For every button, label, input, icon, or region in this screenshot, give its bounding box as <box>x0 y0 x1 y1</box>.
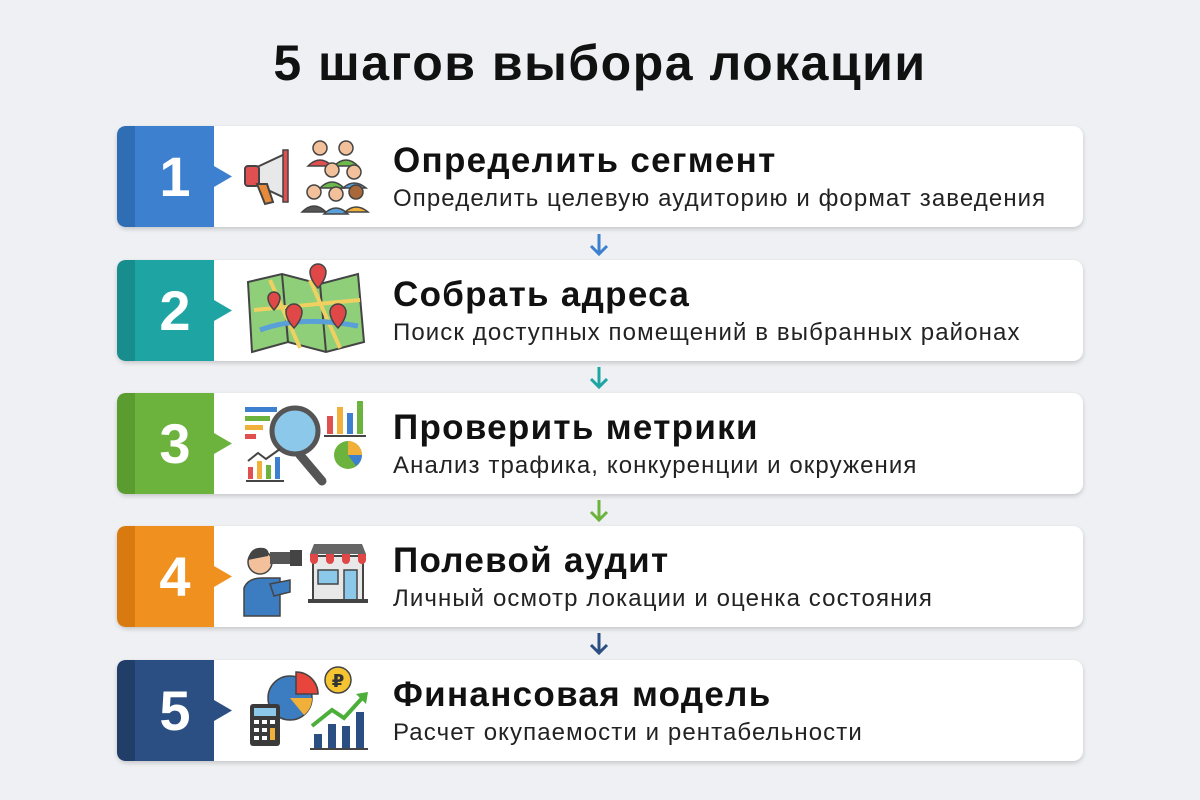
heading 1: Определить сегмент <box>393 141 777 180</box>
heading 3: Проверить метрики <box>393 408 759 447</box>
arrow 4 <box>590 633 608 655</box>
card 4 <box>117 526 1083 627</box>
icon: magnifier & charts <box>245 401 366 486</box>
heading 5: Финансовая модель <box>393 675 772 714</box>
arrow 2 <box>590 367 608 389</box>
arrow 1 <box>590 234 608 256</box>
text 1: Определить целевую аудиторию и формат заведения <box>393 185 1046 212</box>
icon: map <box>247 263 366 354</box>
text 3: Анализ трафика, конкуренции и окружения <box>393 452 918 479</box>
card 3 <box>117 393 1083 494</box>
tab 1 <box>117 126 232 227</box>
card 2 <box>117 260 1083 361</box>
card 1 <box>117 126 1083 227</box>
text 5: Расчет окупаемости и рентабельности <box>393 719 863 746</box>
tab 5 <box>117 660 232 761</box>
icon: binoculars & shop <box>243 544 368 617</box>
tab 3 <box>117 393 232 494</box>
tab 4 <box>117 526 232 627</box>
card 3: 3 <box>159 412 191 475</box>
icon: megaphone & people <box>244 140 370 215</box>
arrow 3 <box>590 500 608 522</box>
heading 4: Полевой аудит <box>393 541 669 580</box>
title: 5 шагов выбора локации <box>273 35 927 91</box>
card 5: 5 <box>159 679 191 742</box>
heading 2: Собрать адреса <box>393 275 690 314</box>
icon: finance: ₽ <box>332 671 344 691</box>
card 5 <box>117 660 1083 761</box>
text 2: Поиск доступных помещений в выбранных районах <box>393 319 1021 346</box>
tab 2 <box>117 260 232 361</box>
card 2: 2 <box>159 279 191 342</box>
text 4: Личный осмотр локации и оценка состояния <box>393 585 933 612</box>
card 4: 4 <box>159 545 191 608</box>
icon: finance <box>250 666 368 750</box>
card 1: 1 <box>159 145 191 208</box>
